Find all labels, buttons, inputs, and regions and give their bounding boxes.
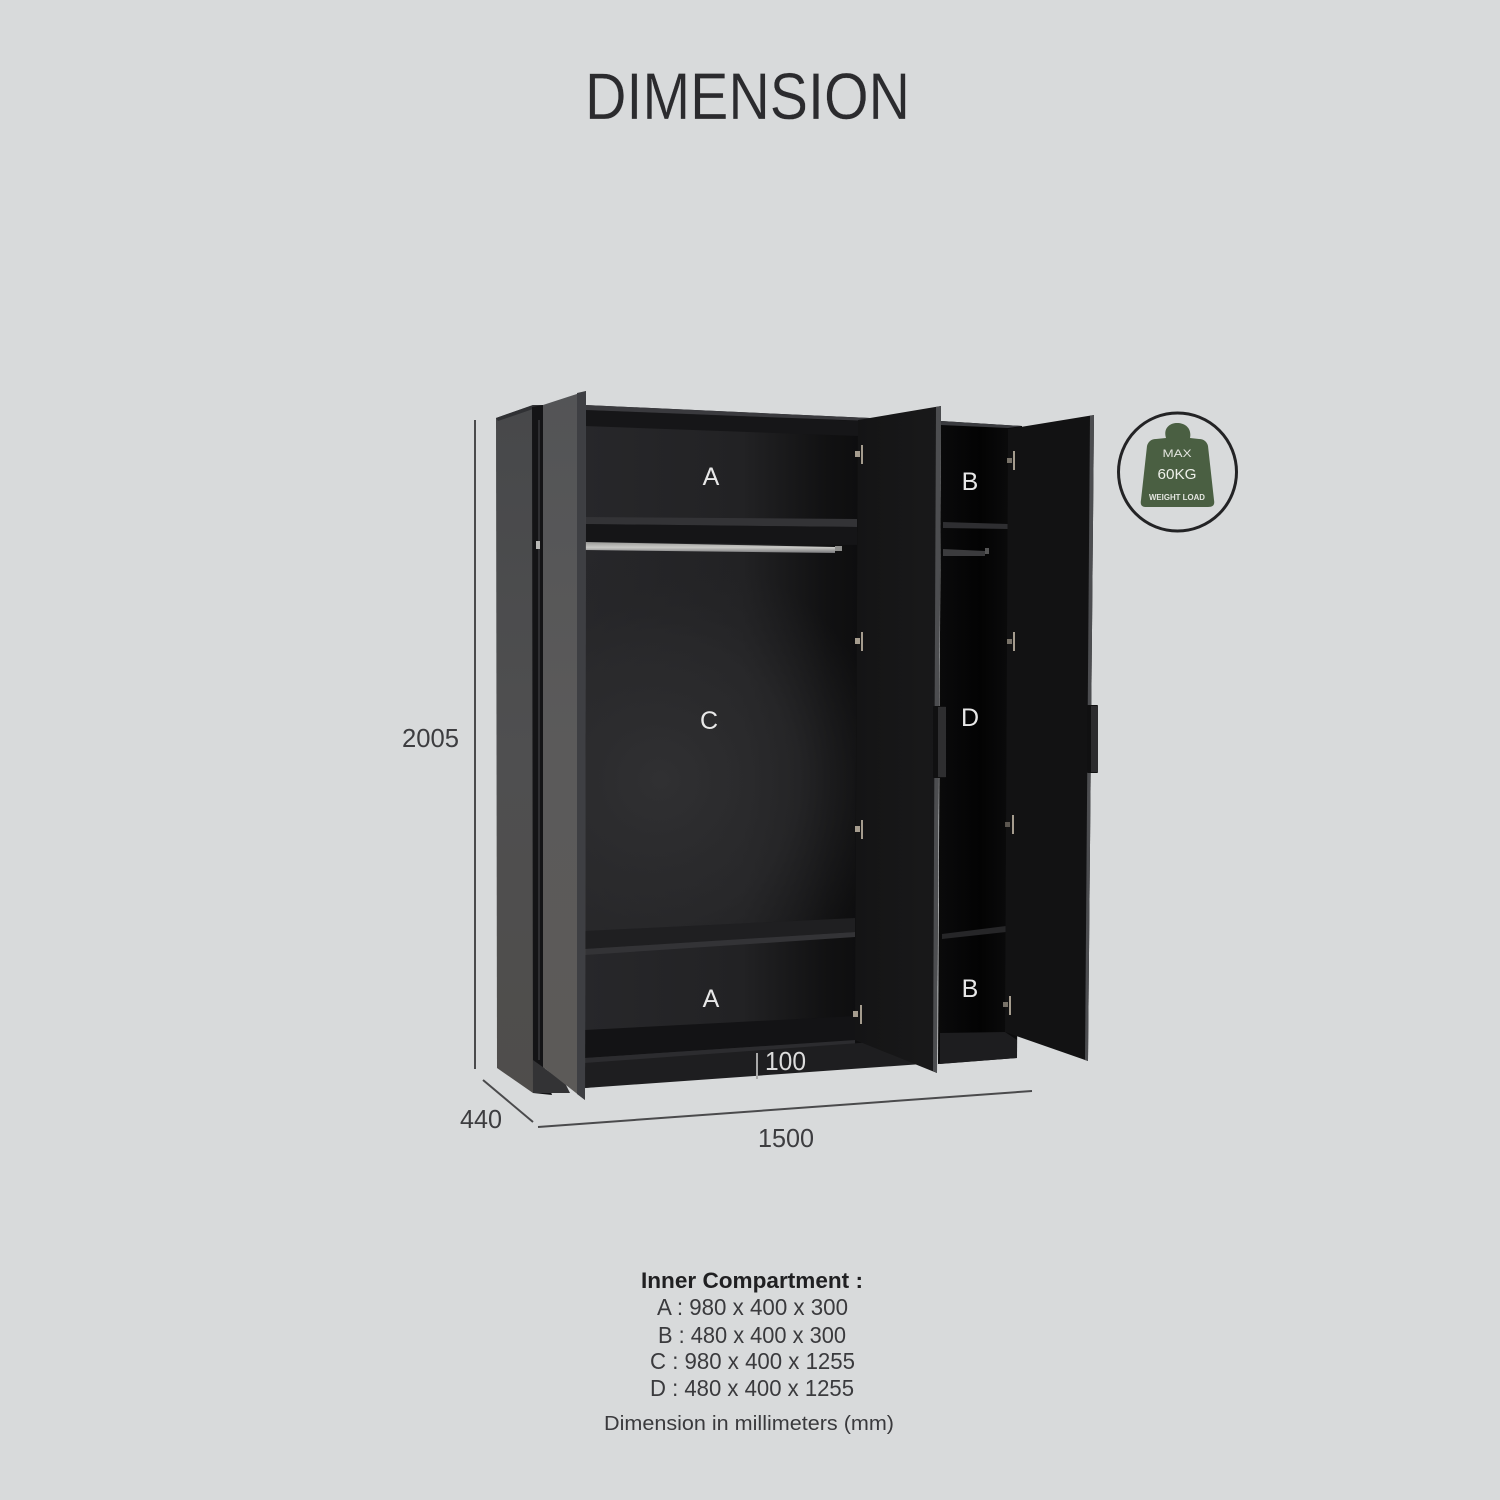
compartment labels: D — [961, 704, 979, 732]
upper shelf — [585, 517, 857, 527]
compartment labels — [700, 463, 979, 1013]
compartment labels: A — [703, 985, 720, 1013]
main compartment interior — [585, 405, 922, 1088]
weight load badge — [1118, 413, 1236, 531]
door handle — [933, 706, 946, 778]
left side panel — [496, 405, 570, 1095]
compartment labels: B — [962, 468, 978, 496]
dimension line: depth: 440 — [460, 1104, 502, 1134]
right door — [1005, 415, 1098, 1061]
left door — [543, 391, 586, 1100]
weight load badge: WEIGHT LOAD — [1149, 493, 1205, 502]
compartment labels: C — [700, 707, 718, 735]
dimension line: width: 1500 — [758, 1123, 814, 1153]
middle door — [855, 406, 946, 1073]
dimension line: depth — [460, 1080, 533, 1134]
dimension line: width — [538, 1091, 1032, 1153]
plinth height marker: 100 — [765, 1046, 806, 1076]
inner compartment text: A : 980 x 400 x 300 — [657, 1294, 848, 1320]
compartment labels: B — [962, 975, 978, 1003]
hanging rail — [585, 542, 842, 553]
inner compartment text: B : 480 x 400 x 300 — [658, 1322, 846, 1348]
right compartment interior — [938, 421, 1022, 1064]
wardrobe illustration — [496, 391, 1098, 1100]
inner compartment text: C : 980 x 400 x 1255 — [650, 1348, 855, 1374]
compartment labels: A — [703, 463, 720, 491]
inner compartment text — [641, 1268, 863, 1401]
weight load badge: MAX — [1162, 448, 1192, 460]
hinges — [853, 445, 1015, 1024]
dimension line: height: 2005 — [402, 723, 459, 753]
door handle — [1087, 705, 1098, 773]
inner compartment text: D : 480 x 400 x 1255 — [650, 1375, 854, 1401]
lower shelf — [585, 918, 855, 949]
title: DIMENSION — [585, 59, 910, 133]
inner compartment text: Inner Compartment : — [641, 1268, 863, 1293]
compartment floor and plinth — [585, 1016, 855, 1058]
units note: Dimension in millimeters (mm) — [604, 1413, 894, 1435]
weight load badge: 60KG — [1158, 466, 1196, 483]
